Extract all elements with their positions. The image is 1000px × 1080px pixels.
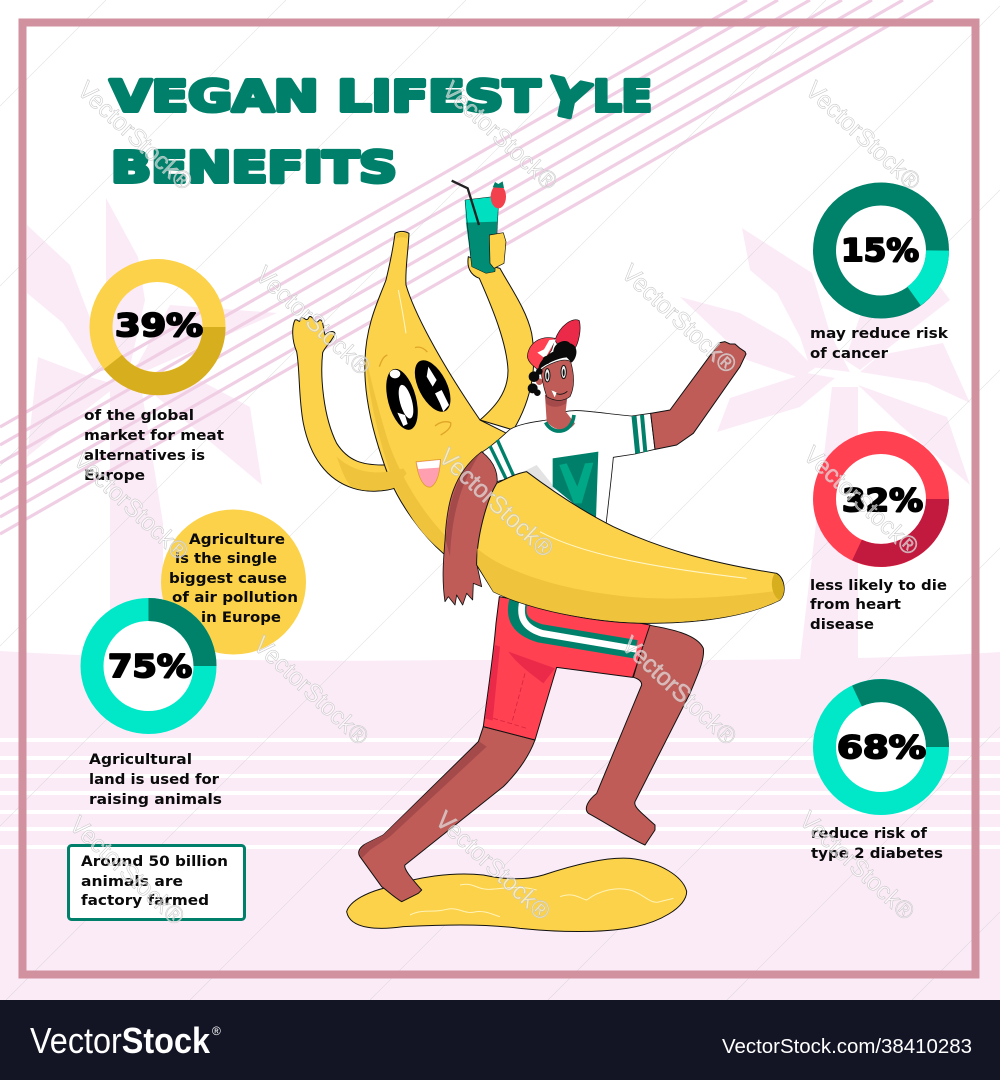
text: heart disease	[810, 578, 947, 633]
watermarks: VectorStock®	[64, 811, 190, 931]
big banana highlight	[540, 532, 747, 578]
man's head	[527, 320, 580, 400]
title	[110, 67, 652, 193]
banana raised arm	[468, 257, 534, 430]
illustration: puddle and man's legs and shorts	[347, 597, 704, 931]
text: global market: of the global	[84, 408, 194, 424]
banana body shade	[366, 233, 453, 553]
footer bar: VectorStock	[30, 1020, 211, 1061]
stat: 39% donut	[101, 270, 214, 384]
callout: air pollution: of air pollution	[172, 590, 298, 606]
man's shirt	[483, 411, 655, 525]
stat: 75% donut	[92, 610, 205, 722]
stat: 68% donut: 68%	[837, 730, 926, 766]
footer bar	[0, 1000, 1000, 1080]
watermarks: VectorStock®	[430, 806, 556, 926]
text: agricultural land: raising animals	[89, 792, 222, 808]
watermarks: VectorStock®	[248, 631, 374, 751]
watermarks: VectorStock®	[437, 76, 563, 196]
title: Y	[541, 67, 595, 132]
big banana shade	[477, 548, 780, 623]
title: LE	[593, 72, 652, 122]
shirt sleeve stripes	[490, 415, 645, 480]
puddle ripples	[410, 884, 673, 917]
shorts stripes	[517, 598, 637, 649]
callout box: factory farmed: factory farmed	[81, 893, 209, 909]
footer bar: ®	[212, 1024, 221, 1038]
text: global market: Europe	[84, 468, 145, 484]
callout box: factory farmed: Around 50 billion	[81, 854, 228, 870]
watermarks: VectorStock®	[616, 631, 742, 751]
text: heart disease: disease	[810, 617, 874, 633]
body highlight	[398, 290, 406, 333]
watermarks	[64, 76, 926, 931]
stat: 15% donut: 15%	[841, 233, 919, 269]
background: left palm tree	[27, 198, 277, 660]
banana character body	[365, 231, 513, 555]
glass hand fingers	[489, 233, 506, 268]
front leg	[359, 727, 535, 902]
text: global market: market for meat	[84, 428, 224, 444]
background: diagonal pink stripes	[0, 0, 933, 534]
text: cancer: of cancer	[810, 346, 889, 362]
stat: 32% donut: 32%	[842, 483, 923, 519]
text: diabetes	[811, 826, 943, 862]
shorts shading	[485, 645, 555, 721]
stat: 68% donut	[824, 690, 938, 804]
callout box: factory farmed: animals are	[81, 874, 183, 890]
callout box: factory farmed	[68, 846, 244, 920]
back leg	[586, 625, 704, 845]
man's neck	[545, 395, 575, 430]
title: VEGAN LIFEST	[110, 72, 541, 122]
background: right palm tree	[680, 228, 970, 660]
cap	[527, 338, 555, 370]
neck shadow	[545, 395, 567, 407]
stat: 15% donut	[824, 194, 938, 307]
callout: air pollution: is the single	[175, 551, 277, 567]
arm shade	[446, 453, 480, 557]
banana puddle	[347, 858, 687, 931]
watermarks: VectorStock®	[68, 446, 194, 566]
watermarks: VectorStock®	[794, 806, 920, 926]
text: agricultural land: land is used for	[89, 772, 220, 788]
front leg shade	[360, 742, 487, 858]
footer bar: VectorStock.com/38410283	[722, 1036, 972, 1058]
text: global market	[84, 408, 224, 484]
watermarks: VectorStock®	[616, 259, 742, 379]
watermarks: VectorStock®	[798, 441, 924, 561]
text: global market: alternatives is	[84, 448, 205, 464]
glass with drink	[452, 181, 506, 273]
text: diabetes: type 2 diabetes	[811, 846, 943, 862]
banana waving arm	[293, 317, 407, 491]
title: BENEFITS	[111, 143, 397, 193]
stat: 75% donut: 75%	[108, 649, 192, 685]
watermarks: VectorStock®	[433, 443, 559, 563]
big banana	[477, 472, 784, 623]
text: cancer: may reduce risk	[810, 326, 948, 342]
text: agricultural land	[89, 752, 222, 808]
callout: air pollution: Agriculture	[189, 532, 285, 548]
background: pink ground with white stripes	[0, 651, 1000, 1000]
watermarks: VectorStock®	[250, 261, 376, 381]
watermarks: VectorStock®	[800, 76, 926, 196]
callout: air pollution	[161, 510, 306, 654]
stat: 32% donut	[824, 442, 938, 556]
shorts seam	[493, 673, 527, 728]
watermarks: VectorStock®	[72, 76, 198, 196]
man's raised arm	[651, 342, 746, 449]
text: heart disease: from heart	[810, 597, 901, 613]
illustration: banana character and man	[293, 181, 784, 623]
text: heart disease: less likely to die	[810, 578, 947, 594]
shirt collar	[546, 415, 574, 431]
callout: air pollution: biggest cause	[169, 571, 287, 587]
man's hanging arm	[443, 452, 497, 605]
strawberry	[491, 185, 506, 208]
banana tip	[772, 573, 784, 600]
banana arm shade	[337, 457, 407, 491]
text: agricultural land: Agricultural	[89, 752, 192, 768]
stat: 39% donut: 39%	[115, 308, 203, 344]
text: diabetes: reduce risk of	[811, 826, 928, 842]
banana face	[379, 347, 458, 487]
shirt shadow and V patch	[513, 452, 598, 518]
callout: air pollution: in Europe	[201, 610, 281, 626]
red shorts	[483, 597, 650, 740]
hair	[528, 341, 576, 396]
text: cancer	[810, 326, 948, 362]
